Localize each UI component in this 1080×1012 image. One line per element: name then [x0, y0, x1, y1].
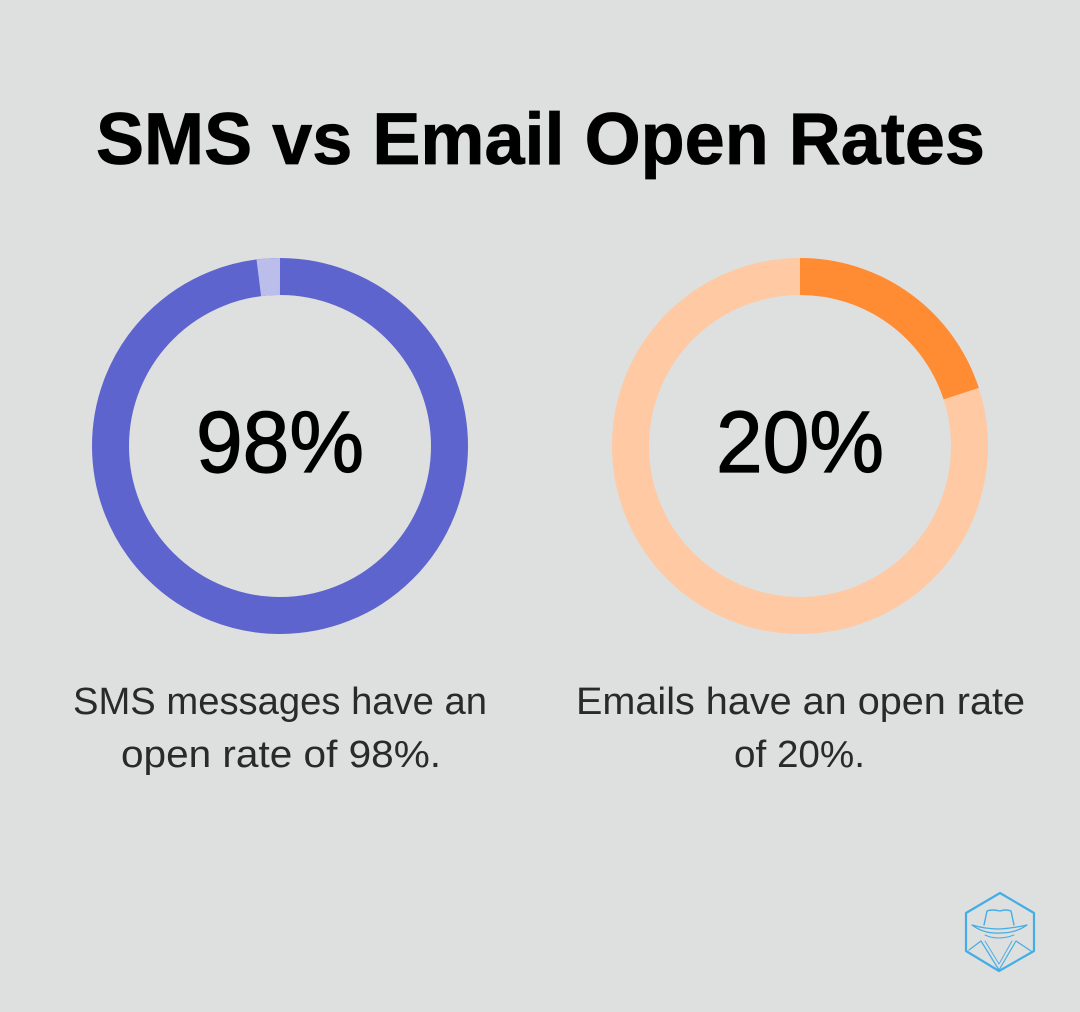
value: 20%: 20% [716, 394, 884, 491]
panel: Email open rate [576, 276, 1025, 776]
caption: SMS [73, 681, 487, 776]
caption: SMS: open rate of 98%. [121, 734, 441, 776]
caption: Email: Emails have an open rate [576, 681, 1025, 723]
donut chart: SMS 98% [110, 276, 450, 616]
icon: hexagon logo with hat and coat figure [966, 893, 1034, 971]
title: SMS vs Email Open Rates [96, 99, 985, 180]
caption: Email [576, 681, 1025, 776]
caption: SMS: SMS messages have an [73, 681, 487, 723]
panel: SMS open rate [73, 276, 487, 776]
donut chart: Email 20% [630, 276, 970, 616]
caption: Email: of 20%. [734, 734, 865, 776]
value: 98%: 98% [196, 394, 364, 491]
